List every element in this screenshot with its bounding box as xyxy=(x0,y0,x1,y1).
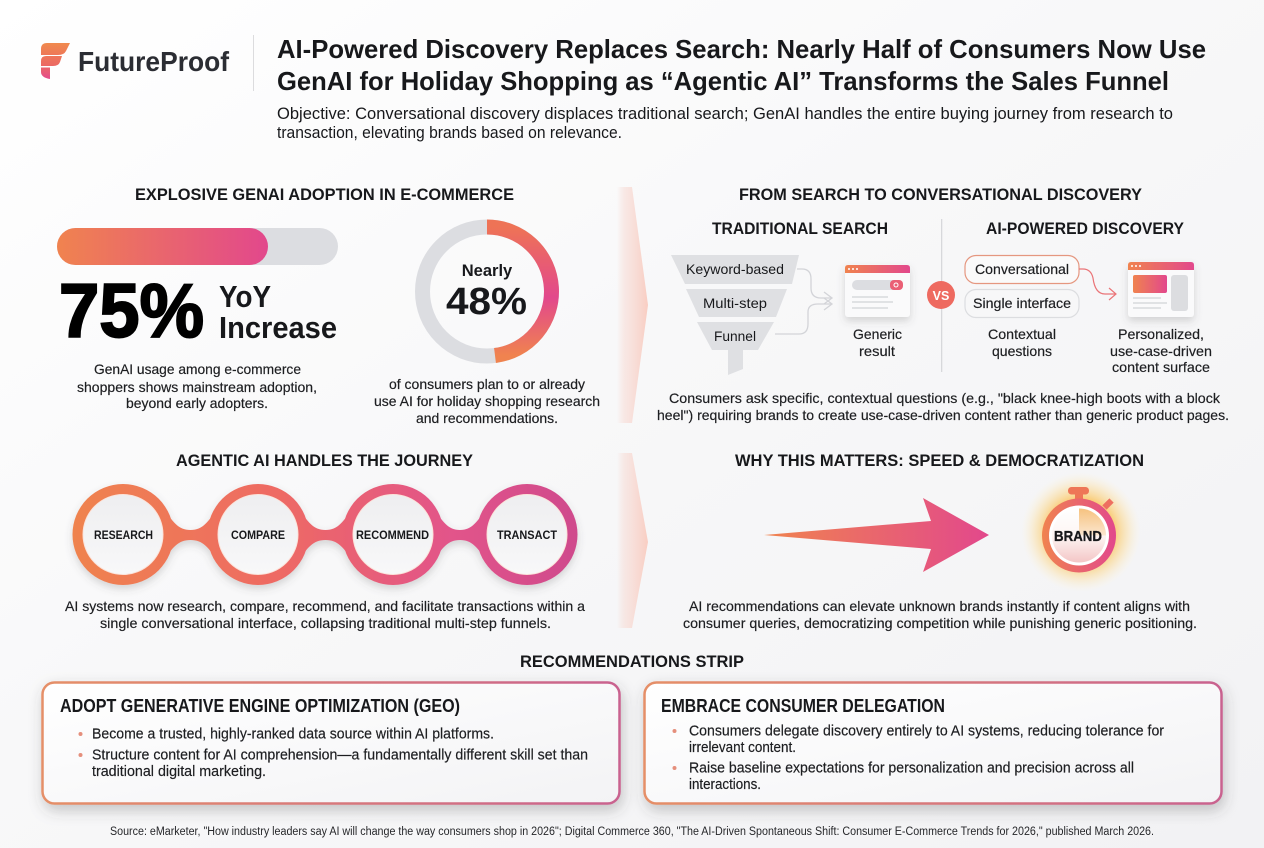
objective text xyxy=(277,105,1173,142)
step: compare: COMPARE xyxy=(231,528,285,542)
stat: 75% YoY increase xyxy=(59,269,337,354)
title: GenAI for Holiday Shopping as “Agentic AI” Transforms the Sales Funnel xyxy=(277,66,1169,96)
chevron divider top xyxy=(617,187,648,423)
stat: 75% YoY increase: YoY xyxy=(219,279,271,314)
step: compare xyxy=(218,494,298,574)
label: personalized surface xyxy=(1110,326,1212,375)
step: research xyxy=(83,494,163,574)
text: AI systems: single conversational interface, collapsing traditional multi-step funnels. xyxy=(100,615,551,631)
step: recommend: RECOMMEND xyxy=(356,528,429,542)
funnel xyxy=(671,255,799,375)
text: GenAI usage: shoppers shows mainstream adoption, xyxy=(77,379,317,395)
label: generic result: Generic xyxy=(853,326,902,342)
text: consumers ask: heel") requiring brands to create use-case-driven content rather than generic product pages. xyxy=(657,407,1229,423)
panel: embrace consumer delegation xyxy=(644,682,1222,804)
arrow: to content surface xyxy=(1079,269,1116,300)
bullet list: delegation xyxy=(672,724,1164,793)
subheading: AI-powered discovery: AI-POWERED DISCOVERY xyxy=(986,219,1185,238)
label: personalized surface: content surface xyxy=(1112,359,1210,375)
step: recommend xyxy=(353,494,433,574)
text: AI recommendations: AI recommendations can elevate unknown brands instantly if content aligns with xyxy=(689,598,1190,614)
label: contextual questions: Contextual xyxy=(988,326,1056,342)
text: AI systems xyxy=(65,598,585,631)
panel: why this matters xyxy=(683,451,1197,631)
step: transact xyxy=(487,494,567,574)
label: contextual questions: questions xyxy=(992,343,1052,359)
heading: why this matters: WHY THIS MATTERS: SPEED & DEMOCRATIZATION xyxy=(735,451,1144,470)
card heading: delegation: EMBRACE CONSUMER DELEGATION xyxy=(661,696,945,716)
icon: stopwatch brand: BRAND xyxy=(1054,529,1102,545)
panel: adopt GEO xyxy=(42,682,620,804)
bullet list: delegation: Raise baseline expectations for personalization and precision across all xyxy=(689,760,1134,776)
stat: 75% YoY increase: 75% xyxy=(59,269,204,354)
funnel: Funnel xyxy=(714,328,756,344)
subheading: traditional search: TRADITIONAL SEARCH xyxy=(712,219,888,238)
text: consumers plan xyxy=(374,376,600,426)
label: personalized surface: Personalized, xyxy=(1118,326,1204,342)
text: AI systems: AI systems now research, compare, recommend, and facilitate transactions within a xyxy=(65,598,585,614)
donut chart 48%: 48% xyxy=(446,281,527,323)
label: generic result xyxy=(853,326,902,359)
chevron divider bottom xyxy=(617,453,648,628)
donut chart 48%: Nearly xyxy=(462,262,513,280)
label: personalized surface: use-case-driven xyxy=(1110,343,1212,359)
donut chart 48% xyxy=(422,227,552,356)
stat: 75% YoY increase: Increase xyxy=(219,310,337,345)
step: transact: TRANSACT xyxy=(497,528,558,542)
bullet list: GEO xyxy=(78,726,588,780)
label: generic result: result xyxy=(859,343,895,359)
bullet list: GEO: traditional digital marketing. xyxy=(92,764,266,780)
icon: stopwatch brand xyxy=(1021,472,1141,592)
speed lines xyxy=(1005,520,1038,550)
chain of steps xyxy=(72,484,578,585)
progress bar 75% xyxy=(57,228,338,265)
bullet list: delegation: interactions. xyxy=(689,777,761,793)
bullet list: GEO: Structure content for AI comprehension—a fundamentally different skill set than xyxy=(92,748,588,764)
logo wordmark: FutureProof xyxy=(78,46,230,77)
heading: conversational discovery: FROM SEARCH TO CONVERSATIONAL DISCOVERY xyxy=(739,185,1143,204)
text: consumers plan: use AI for holiday shopping research xyxy=(374,393,600,409)
text: GenAI usage xyxy=(77,361,317,411)
logo: FutureProof xyxy=(41,43,230,79)
bullet list: delegation: irrelevant content. xyxy=(689,740,796,756)
card heading: GEO: ADOPT GENERATIVE ENGINE OPTIMIZATION (GEO) xyxy=(60,696,460,716)
funnel: Multi-step xyxy=(703,295,767,311)
heading: recommendations strip: RECOMMENDATIONS STRIP xyxy=(520,652,744,671)
pill: conversational: Conversational xyxy=(975,261,1069,277)
text: GenAI usage: beyond early adopters. xyxy=(126,395,268,411)
icon: logo mark xyxy=(41,43,70,79)
icon: generic result window xyxy=(845,265,910,317)
text: consumers plan: and recommendations. xyxy=(416,410,558,426)
step: research: RESEARCH xyxy=(94,528,153,542)
bullet list: GEO: Become a trusted, highly-ranked data source within AI platforms. xyxy=(92,726,494,742)
text: consumers ask: Consumers ask specific, contextual questions (e.g., "black knee-high boots with a block xyxy=(669,390,1221,406)
pill: single interface: Single interface xyxy=(973,295,1071,311)
title xyxy=(277,34,1206,96)
heading: agentic AI: AGENTIC AI HANDLES THE JOURNEY xyxy=(176,451,474,470)
icon: personalized window xyxy=(1128,262,1194,317)
badge: VS xyxy=(927,281,955,309)
heading: adoption: EXPLOSIVE GENAI ADOPTION IN E-COMMERCE xyxy=(135,185,514,204)
arrow: speed xyxy=(764,498,989,572)
text: consumers ask xyxy=(657,390,1229,423)
objective text: Objective: Conversational discovery displaces traditional search; GenAI handles the entire buying journey from research to xyxy=(277,105,1173,123)
panel: explosive GenAI adoption xyxy=(57,185,600,426)
panel: search to conversational discovery xyxy=(657,185,1229,423)
text: AI recommendations xyxy=(683,598,1197,631)
text: GenAI usage: GenAI usage among e-commerce xyxy=(94,361,301,377)
source footnote: Source: eMarketer, "How industry leaders say AI will change the way consumers shop in 2026"; Digital Commerce 360, "The AI-Driven Spontaneous Shift: Consumer E-Commerce Trends for 2026," published March 2026. xyxy=(110,826,1154,838)
objective text: transaction, elevating brands based on relevance. xyxy=(277,124,622,142)
text: AI recommendations: consumer queries, democratizing competition while punishing generic positioning. xyxy=(683,615,1197,631)
funnel: Keyword-based xyxy=(686,261,784,277)
badge: VS: VS xyxy=(933,289,949,303)
title: AI-Powered Discovery Replaces Search: Nearly Half of Consumers Now Use xyxy=(277,34,1206,64)
text: consumers plan: of consumers plan to or already xyxy=(389,376,585,392)
pill: conversational xyxy=(965,256,1079,284)
arrows: funnel to result xyxy=(775,269,832,334)
panel: agentic AI journey xyxy=(65,451,585,631)
bullet list: delegation: Consumers delegate discovery entirely to AI systems, reducing tolerance for xyxy=(689,724,1164,740)
label: contextual questions xyxy=(988,326,1056,359)
pill: single interface xyxy=(965,290,1079,318)
